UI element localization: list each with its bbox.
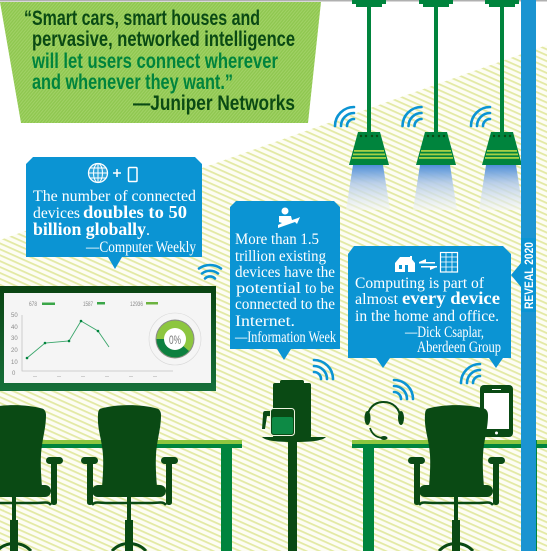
dashboard legend: 12936 [130, 302, 144, 308]
lamp wifi icons [335, 107, 490, 126]
callout text: The number of connected [33, 188, 196, 205]
line chart: 20 [11, 348, 18, 354]
callout text [234, 231, 336, 346]
headset wifi icon [394, 380, 413, 399]
top edge [0, 0, 547, 2]
coffee wifi icon [314, 360, 333, 379]
vertical timeline bar [521, 0, 536, 551]
callout: information week [230, 201, 340, 360]
chair right [408, 405, 505, 551]
pendant lamps [346, 0, 523, 210]
dashboard legend [29, 302, 158, 308]
icon: person with arrow [278, 208, 300, 228]
callout text: Internet. [235, 313, 295, 330]
callout text: trillion existing [235, 248, 326, 265]
headset icon [364, 402, 404, 440]
coffee maker on side table [262, 380, 326, 551]
chair middle [81, 405, 178, 551]
callout text: almost [355, 291, 399, 308]
callout text: potential [236, 280, 302, 297]
callout text: in the home and office. [355, 308, 499, 325]
callout text: devices have the [235, 264, 335, 281]
callout text: connected to the [235, 296, 335, 313]
line chart: 10 [11, 360, 18, 366]
donut chart [149, 313, 201, 365]
table strip right of bar [536, 440, 537, 551]
callout text: doubles to 50 [83, 202, 187, 222]
quote text: —Juniper Networks [133, 92, 295, 115]
quote text: will let users connect wherever [31, 50, 278, 73]
quote panel [0, 2, 321, 123]
quote text [24, 7, 295, 115]
chair left [0, 405, 63, 551]
callout text: billion globally [33, 219, 146, 239]
line chart: 50 [11, 313, 18, 319]
callout text: every device [402, 288, 500, 308]
callout text [355, 275, 501, 356]
right table [352, 440, 547, 551]
callout: computer weekly [26, 157, 202, 269]
callout text: —Information Week [234, 329, 336, 346]
quote text: “Smart cars, smart houses and [24, 7, 260, 30]
quote text: pervasive, networked intelligence [32, 28, 295, 51]
icon: globe [88, 164, 108, 182]
left table [0, 440, 242, 551]
quote text: and whenever they want.” [32, 71, 233, 94]
callout text: —Computer Weekly [85, 239, 196, 256]
monitor dashboard [0, 286, 216, 391]
callout text: Computing is part of [355, 275, 485, 292]
blue bar over table [521, 435, 536, 551]
icon: phone [128, 168, 137, 182]
callout text: More than 1.5 [235, 231, 319, 248]
callout text: Aberdeen Group [417, 339, 501, 356]
dashboard legend: 1587 [83, 302, 93, 308]
line chart: 40 [11, 325, 18, 331]
tablet wifi icon [461, 364, 480, 383]
reveal 2020 label: REVEAL 2020 [522, 242, 536, 309]
line chart [11, 313, 173, 377]
line chart: 30 [11, 336, 18, 342]
dashboard legend: 678 [29, 302, 38, 308]
callout text: to be [305, 280, 334, 297]
icon: house to building [395, 252, 458, 272]
line chart: 0 [12, 371, 16, 377]
callout text: —Dick Csaplar, [404, 324, 484, 341]
callout text [33, 188, 196, 256]
icon: plus [113, 169, 121, 177]
donut chart: 0% [169, 333, 181, 347]
callout text: . [146, 222, 150, 239]
wifi icon above monitor [199, 265, 221, 278]
coffee pot [262, 408, 294, 436]
tablet icon [480, 385, 513, 437]
timeline marker [511, 238, 536, 312]
callout text: devices [33, 205, 80, 222]
callout: aberdeen group [348, 246, 511, 368]
